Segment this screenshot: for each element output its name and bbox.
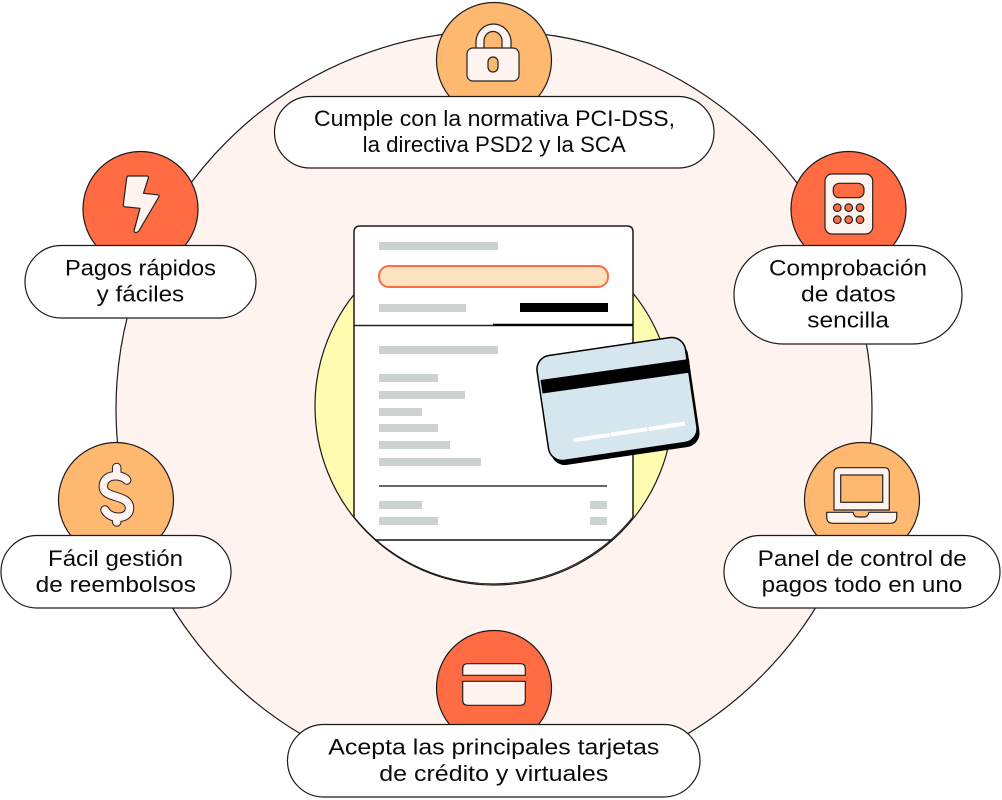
label: dashboard	[724, 536, 1000, 608]
label: fast payments: Pagos rápidos	[65, 256, 216, 280]
label: fast payments: y fáciles	[97, 282, 184, 306]
icon: dollar sign	[58, 442, 174, 558]
label: data check: sencilla	[807, 308, 890, 332]
label: fast payments	[25, 246, 256, 318]
icon: padlock	[436, 2, 552, 118]
label: compliance: la directiva PSD2 y la SCA	[363, 132, 626, 157]
label: data check: Comprobación	[769, 256, 927, 280]
central illustration: receipt and credit card	[315, 226, 701, 585]
feature: cards	[288, 630, 700, 797]
feature: refunds	[1, 442, 231, 608]
feature: fast payments	[25, 152, 256, 318]
label: compliance	[274, 96, 714, 168]
feature: dashboard	[724, 442, 1000, 608]
label: dashboard: pagos todo en uno	[762, 572, 962, 597]
label: refunds	[1, 536, 231, 608]
receipt document	[354, 226, 633, 584]
label: cards: de crédito y virtuales	[379, 761, 608, 786]
large background circle	[116, 31, 872, 787]
label: refunds: de reembolsos	[36, 572, 196, 597]
icon: lightning bolt	[83, 152, 198, 266]
feature: data check	[734, 152, 962, 344]
label: data check: de datos	[801, 282, 896, 306]
label: refunds: Fácil gestión	[48, 546, 183, 571]
icon: calculator	[791, 152, 906, 266]
label: cards	[288, 724, 700, 797]
icon: laptop	[804, 442, 920, 558]
label: data check	[734, 246, 962, 344]
label: dashboard: Panel de control de	[758, 546, 967, 571]
icon: card	[436, 630, 552, 746]
feature: compliance	[274, 2, 714, 168]
yellow circle behind receipt	[315, 227, 673, 585]
label: cards: Acepta las principales tarjetas	[328, 735, 659, 760]
label: compliance: Cumple con la normativa PCI-DSS,	[314, 106, 675, 131]
credit card	[535, 336, 701, 467]
